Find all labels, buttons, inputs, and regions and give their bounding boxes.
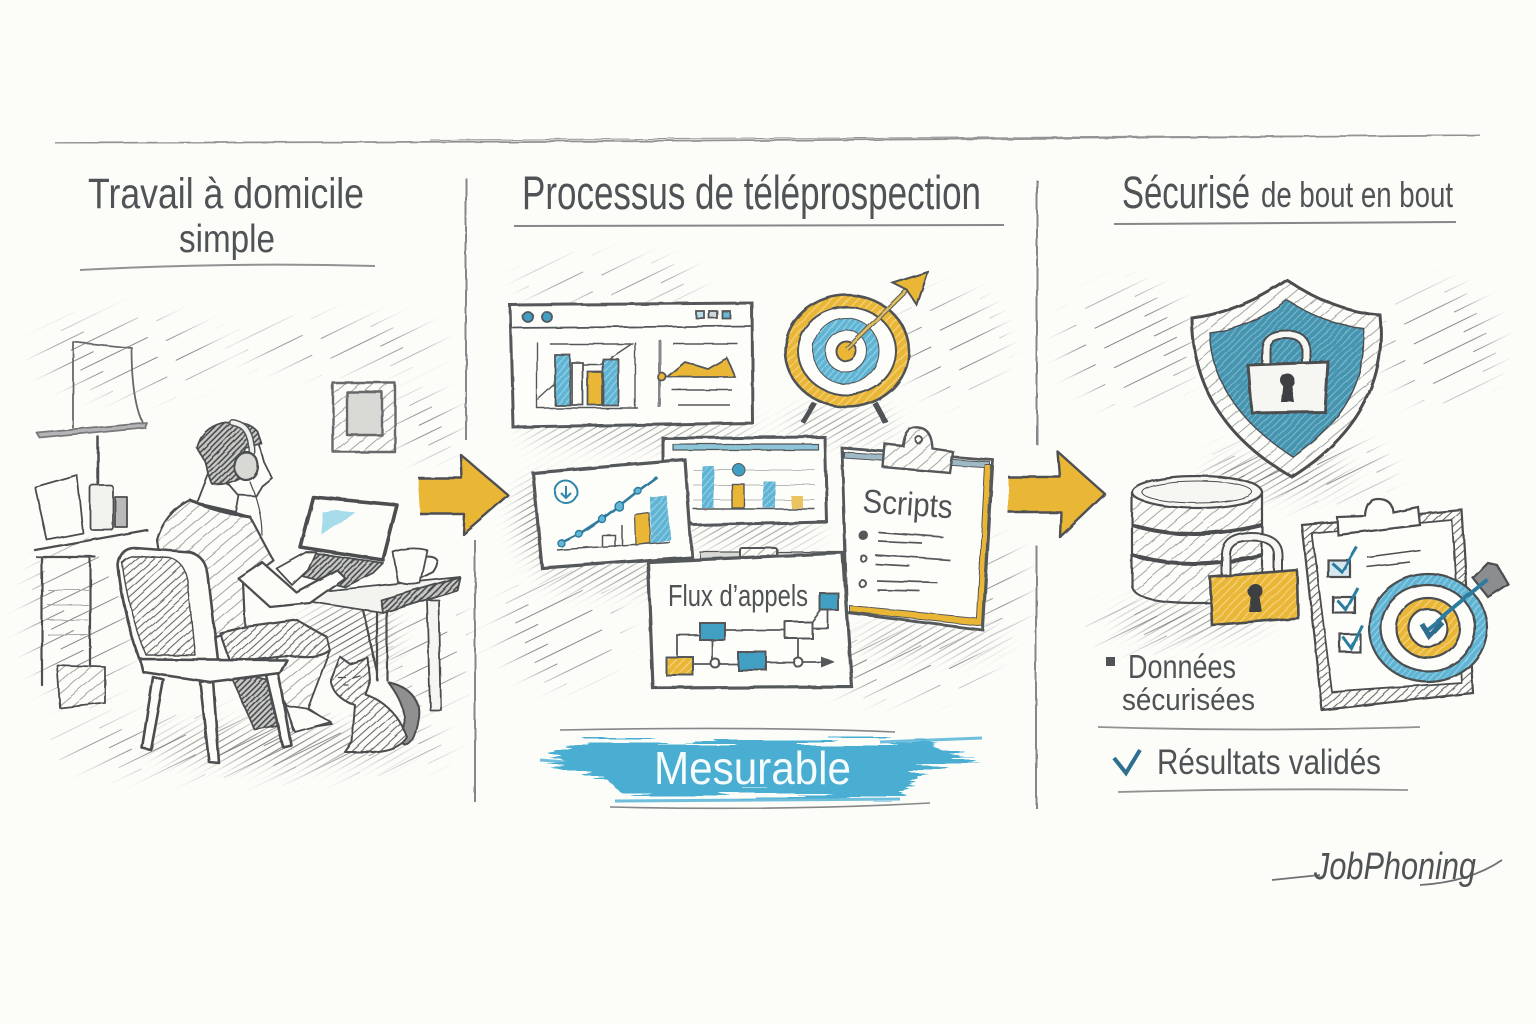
clipboard with target xyxy=(1302,499,1508,710)
target with arrow xyxy=(785,272,928,423)
note: Résultats validés xyxy=(1114,743,1408,792)
laptop xyxy=(290,497,397,587)
database with padlock xyxy=(1132,476,1298,625)
lower legs and shoes xyxy=(228,640,332,732)
banner: Mesurable xyxy=(540,728,982,808)
thigh xyxy=(220,620,330,662)
dashboard window xyxy=(510,303,753,427)
shield with padlock xyxy=(1192,280,1381,477)
chair xyxy=(118,548,291,763)
wall frame xyxy=(333,383,395,452)
shelf with objects xyxy=(35,475,147,708)
card: call flow xyxy=(648,548,852,688)
note: Résultats validés: Résultats validés xyxy=(1157,743,1381,782)
note: Données sécurisées: sécurisées xyxy=(1122,682,1255,717)
heading: Sécurisé de bout en bout xyxy=(1114,167,1456,224)
torso and T-shirt xyxy=(157,500,273,640)
card: line chart xyxy=(533,460,692,568)
card: call flow: Flux d’appels xyxy=(668,578,808,613)
panel: teleprospecting process xyxy=(510,166,1004,808)
wall and shadow hatching xyxy=(14,249,1510,788)
column dividers xyxy=(466,178,1037,808)
heading: Travail à domicile simple xyxy=(80,170,375,270)
arrow: step two to three xyxy=(1008,452,1105,537)
desk xyxy=(300,577,460,710)
banner: Mesurable: Mesurable xyxy=(654,742,851,794)
heading: Processus de téléprospection: Processus de téléprospection xyxy=(522,166,981,219)
arrow: step one to two xyxy=(418,455,508,534)
logo: JobPhoning: JobPhoning xyxy=(1313,846,1476,888)
card: bar chart xyxy=(663,437,827,525)
panel: working from home xyxy=(35,170,460,763)
panel: end-to-end security xyxy=(1098,167,1508,792)
note: Données sécurisées xyxy=(1098,648,1420,730)
heading: Sécurisé de bout en bout: Sécurisé xyxy=(1122,167,1250,218)
arm and hands xyxy=(238,552,345,607)
room illustration xyxy=(35,342,460,763)
note: Données sécurisées: Données xyxy=(1128,648,1236,685)
heading: Sécurisé de bout en bout: de bout en bout xyxy=(1261,174,1453,215)
clipboard: scripts xyxy=(842,428,993,630)
neck and head xyxy=(197,422,272,535)
cat xyxy=(331,657,419,752)
mug xyxy=(393,548,437,584)
lamp xyxy=(37,342,147,483)
person xyxy=(157,422,345,732)
clipboard: scripts: Scripts xyxy=(862,482,954,525)
top rule xyxy=(55,135,1480,143)
heading: Travail à domicile simple: simple xyxy=(179,218,275,261)
heading: Travail à domicile simple: Travail à domicile xyxy=(88,170,364,218)
